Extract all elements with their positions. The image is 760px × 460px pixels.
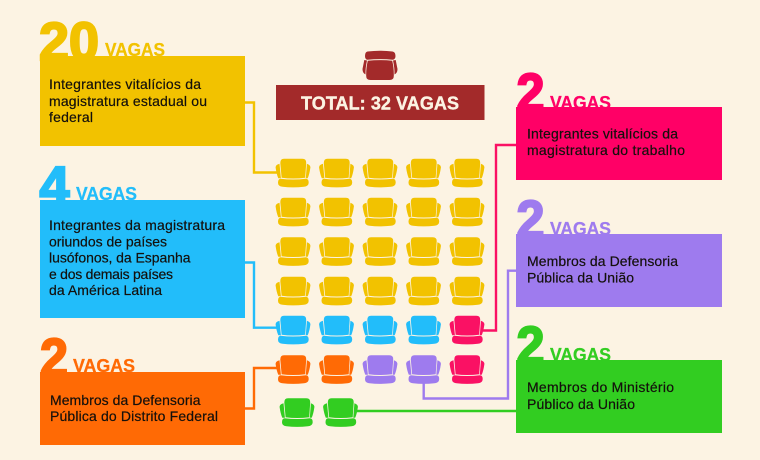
number: 2: 2 bbox=[516, 190, 544, 250]
panel: 20 vagas bbox=[39, 12, 245, 146]
description: Integrantes da magistratura bbox=[49, 217, 225, 233]
description: Integrantes vitalícios da bbox=[527, 126, 678, 142]
label: vagas: VAGAS bbox=[550, 345, 611, 365]
description: e dos demais países bbox=[49, 266, 173, 282]
label: vagas: VAGAS bbox=[105, 40, 165, 60]
description bbox=[49, 76, 207, 125]
connector: yellow bbox=[245, 102, 278, 172]
panel: 2 vagas defensoria união bbox=[516, 190, 722, 307]
box bbox=[516, 234, 722, 307]
label: vagas: VAGAS bbox=[550, 219, 611, 239]
description: lusófonos, da Espanha bbox=[49, 250, 191, 266]
panel: 2 vagas trabalho bbox=[516, 63, 722, 180]
yellow seats bbox=[276, 159, 484, 305]
panel: 4 vagas bbox=[40, 156, 245, 318]
description: Integrantes vitalícios da bbox=[49, 76, 201, 92]
box bbox=[40, 200, 245, 318]
description: Pública da União bbox=[527, 270, 634, 286]
panel: 2 vagas ministério público bbox=[516, 316, 722, 433]
box bbox=[40, 56, 245, 146]
label: vagas: VAGAS bbox=[76, 184, 137, 204]
seat chart bbox=[276, 159, 484, 427]
box bbox=[40, 372, 245, 445]
description: Membros do Ministério bbox=[527, 379, 674, 395]
number: 4: 4 bbox=[40, 156, 70, 216]
description: Membros da Defensoria bbox=[527, 253, 678, 269]
icon: total chair bbox=[362, 51, 398, 80]
description bbox=[527, 379, 674, 412]
green seats bbox=[280, 398, 358, 427]
description: da América Latina bbox=[49, 282, 162, 298]
purple seats bbox=[363, 355, 441, 384]
description: Pública do Distrito Federal bbox=[50, 408, 218, 424]
number: 2: 2 bbox=[516, 63, 544, 123]
box bbox=[516, 107, 722, 180]
description bbox=[49, 217, 225, 298]
blue seats bbox=[276, 316, 441, 344]
total text: TOTAL: 32 VAGAS bbox=[301, 94, 459, 114]
connector: green bbox=[356, 410, 516, 412]
number: 20: 20 bbox=[39, 12, 99, 72]
description bbox=[527, 126, 685, 158]
number: 2: 2 bbox=[516, 316, 544, 376]
label: vagas: VAGAS bbox=[73, 356, 135, 376]
connector: orange bbox=[245, 368, 278, 408]
label: vagas: VAGAS bbox=[550, 93, 611, 113]
connector: pink bbox=[483, 145, 516, 330]
total banner bbox=[276, 85, 484, 120]
description: magistratura estadual ou bbox=[49, 93, 207, 109]
connector: purple bbox=[424, 271, 516, 398]
orange seats bbox=[276, 355, 354, 384]
description: Público da União bbox=[527, 396, 635, 412]
description bbox=[50, 392, 218, 424]
number: 2: 2 bbox=[40, 328, 68, 388]
box bbox=[516, 360, 722, 433]
panel: 2 vagas defensoria DF bbox=[40, 328, 245, 445]
connector: blue bbox=[245, 262, 278, 328]
description: oriundos de países bbox=[49, 234, 167, 250]
description: federal bbox=[49, 109, 93, 125]
pink seats bbox=[450, 316, 484, 384]
description bbox=[527, 253, 678, 286]
description: magistratura do trabalho bbox=[527, 142, 685, 158]
description: Membros da Defensoria bbox=[50, 392, 201, 408]
